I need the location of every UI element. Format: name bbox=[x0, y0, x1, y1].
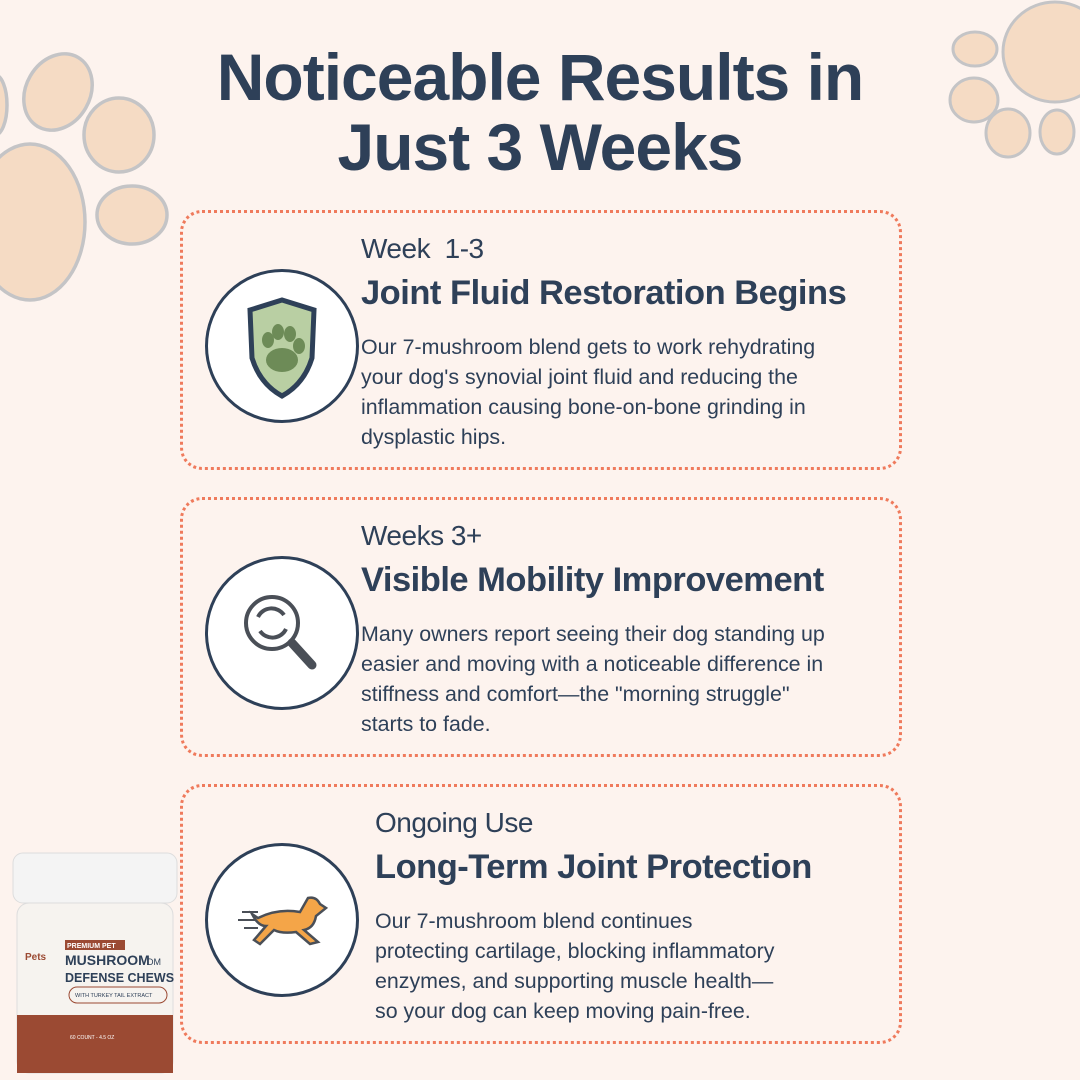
text block: protecting cartilage, blocking inflammatory bbox=[375, 939, 774, 963]
text block: stiffness and comfort—the "morning struggle" bbox=[361, 682, 790, 706]
icon: magnifier bbox=[205, 556, 359, 710]
text block bbox=[361, 520, 825, 736]
text block: inflammation causing bone-on-bone grinding in bbox=[361, 395, 806, 419]
product jar: MUSHROOM bbox=[65, 952, 150, 968]
product jar: WITH TURKEY TAIL EXTRACT bbox=[75, 993, 153, 999]
icon: running dog bbox=[205, 843, 359, 997]
text block: your dog's synovial joint fluid and reducing the bbox=[361, 365, 798, 389]
title bbox=[217, 40, 863, 184]
text block: Visible Mobility Improvement bbox=[361, 561, 824, 599]
product jar: PREMIUM PET bbox=[67, 943, 116, 950]
text block: Ongoing Use bbox=[375, 807, 533, 838]
title: Just 3 Weeks bbox=[337, 110, 742, 184]
text block: easier and moving with a noticeable difference in bbox=[361, 652, 823, 676]
panel: week 1-3 bbox=[180, 210, 902, 470]
product jar: DM bbox=[147, 957, 161, 967]
text block: Joint Fluid Restoration Begins bbox=[361, 274, 846, 312]
decorative paw left bbox=[0, 52, 169, 302]
decorative paw right bbox=[948, 0, 1080, 158]
text block bbox=[375, 807, 812, 1023]
title: Noticeable Results in bbox=[217, 40, 863, 114]
product jar: 60 COUNT - 4.5 OZ bbox=[70, 1035, 114, 1041]
text block: Week 1-3 bbox=[361, 233, 484, 264]
text block: Long-Term Joint Protection bbox=[375, 848, 812, 886]
text block: Many owners report seeing their dog standing up bbox=[361, 622, 825, 646]
text block: enzymes, and supporting muscle health— bbox=[375, 969, 773, 993]
panel: ongoing use bbox=[180, 784, 902, 1044]
text block: Weeks 3+ bbox=[361, 520, 482, 551]
text block bbox=[361, 233, 846, 449]
product jar: Pets bbox=[25, 952, 47, 963]
icon: shield paw bbox=[205, 269, 359, 423]
product jar bbox=[12, 852, 178, 1074]
text block: Our 7-mushroom blend gets to work rehydrating bbox=[361, 335, 815, 359]
text block: dysplastic hips. bbox=[361, 425, 506, 449]
text block: Our 7-mushroom blend continues bbox=[375, 909, 692, 933]
panel: weeks 3+ bbox=[180, 497, 902, 757]
product jar: DEFENSE CHEWS bbox=[65, 971, 174, 985]
text block: so your dog can keep moving pain-free. bbox=[375, 999, 751, 1023]
text block: starts to fade. bbox=[361, 712, 491, 736]
